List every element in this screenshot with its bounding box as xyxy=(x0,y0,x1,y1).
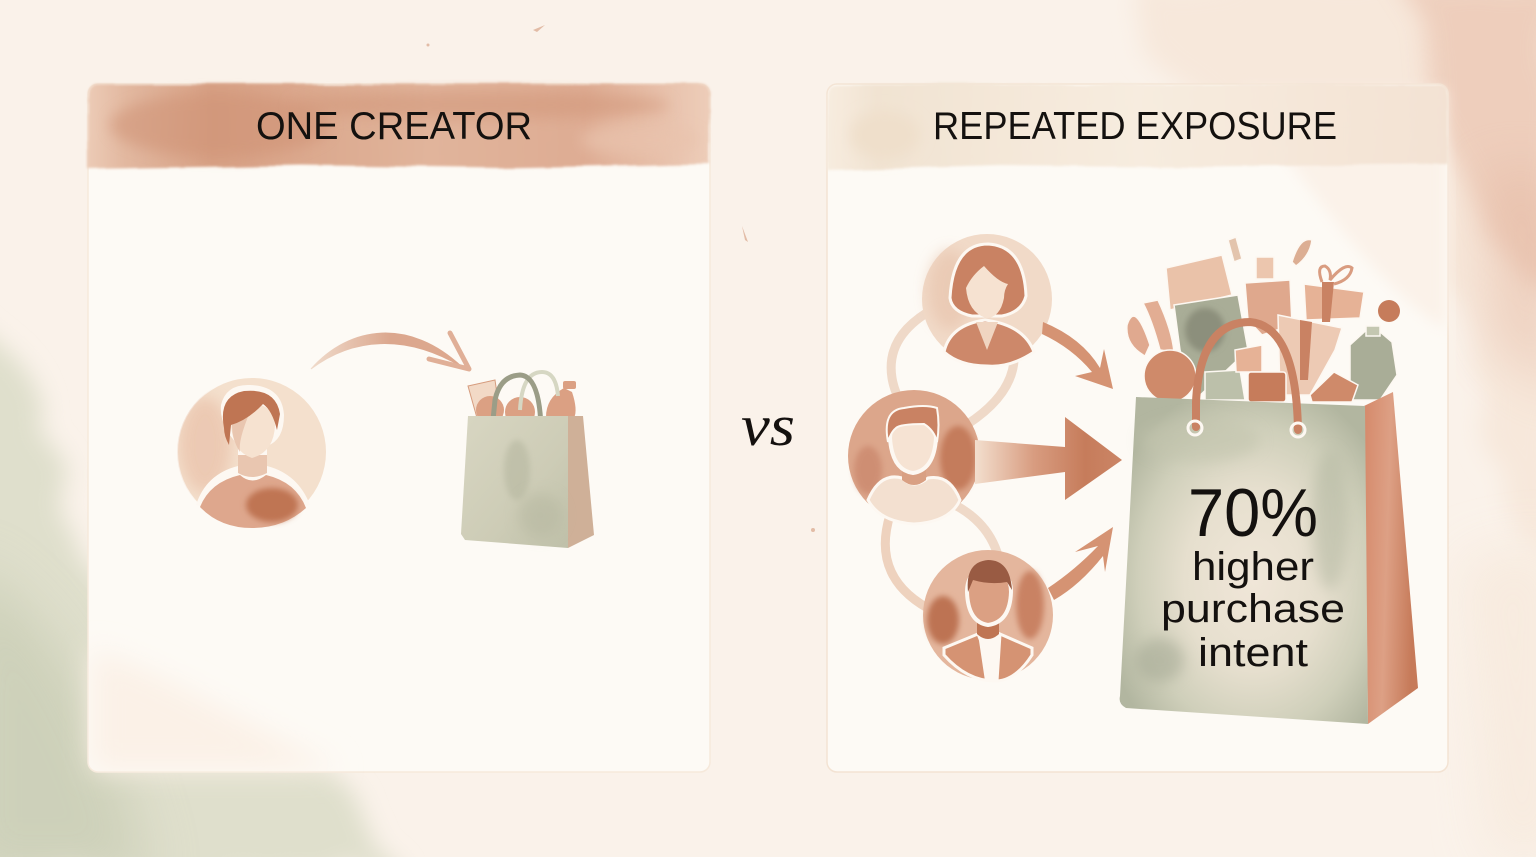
statistic: higher xyxy=(1192,545,1314,589)
icon: man avatar xyxy=(848,390,980,524)
statistic: purchase xyxy=(1161,587,1345,631)
icon: small shopping bag xyxy=(461,372,594,548)
icon: woman avatar xyxy=(922,234,1052,366)
icon: large shopping bag xyxy=(1120,322,1418,724)
bag handle xyxy=(1196,322,1298,430)
icon: man in jacket avatar xyxy=(923,550,1053,681)
header band xyxy=(88,84,710,169)
heading: REPEATED EXPOSURE xyxy=(933,105,1337,148)
panel: one creator xyxy=(88,84,710,772)
panel body xyxy=(88,84,710,772)
bag side gusset xyxy=(1364,392,1418,724)
icon: creator avatar xyxy=(178,378,326,528)
statistic: 70% xyxy=(1188,475,1318,551)
header band xyxy=(827,84,1448,170)
connector loops xyxy=(885,308,1014,612)
bag front xyxy=(1120,397,1368,724)
panel corner wash xyxy=(1240,90,1446,330)
panel corner wash xyxy=(92,650,340,770)
arrow: man to bag xyxy=(975,417,1122,500)
arrow: woman to bag xyxy=(1042,322,1113,389)
vs label: vs xyxy=(741,393,795,458)
specks xyxy=(426,25,815,532)
panel body xyxy=(827,84,1448,772)
arrow: jacket man to bag xyxy=(1048,527,1113,600)
arrow: creator to bag xyxy=(311,333,469,369)
icon: products in bag xyxy=(1127,237,1400,402)
statistic xyxy=(1161,475,1345,675)
panel: repeated exposure xyxy=(827,84,1448,772)
statistic: intent xyxy=(1198,631,1308,675)
heading: ONE CREATOR xyxy=(256,105,532,148)
